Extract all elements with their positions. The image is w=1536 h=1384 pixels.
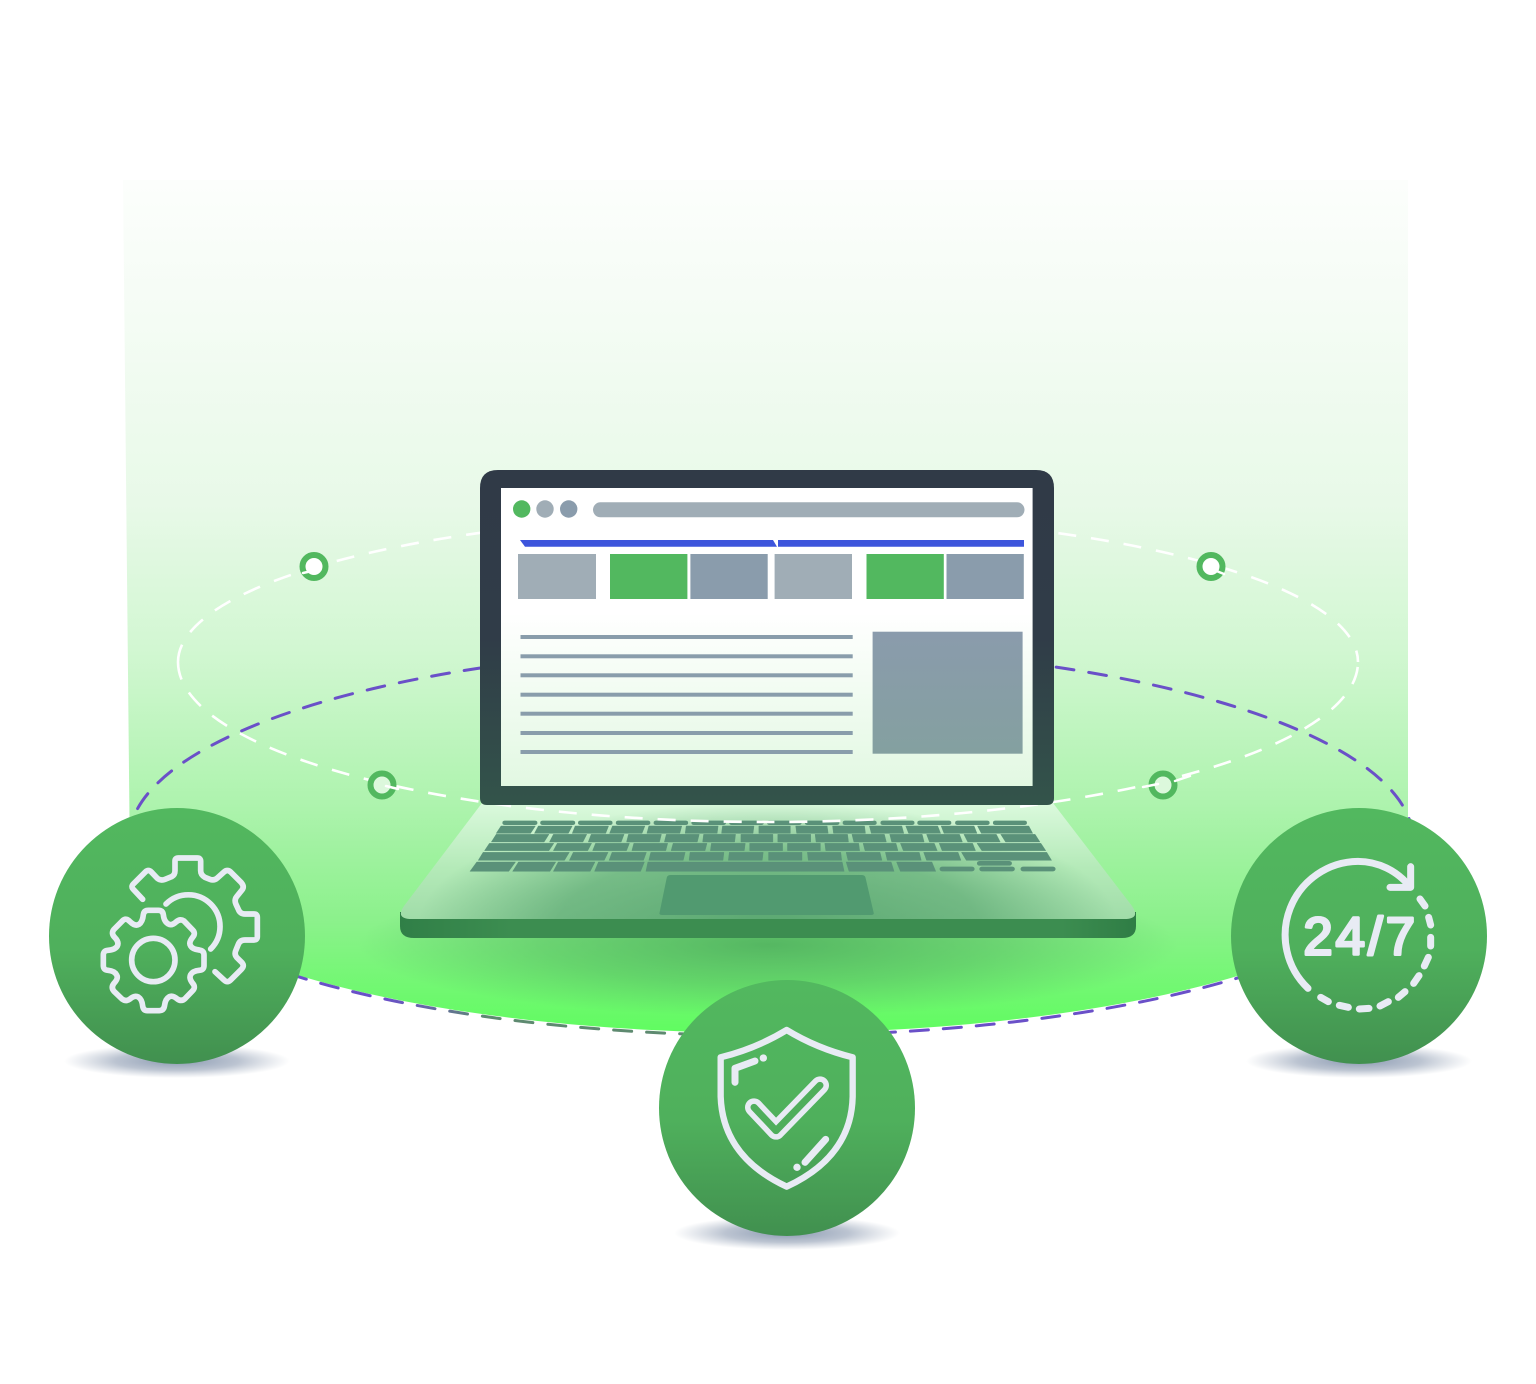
background green glow panel [123,180,1408,1033]
icon: gears [103,858,257,1011]
base deck shading [401,803,1135,919]
orbit ring marker top left [302,555,326,578]
window dots [513,500,577,518]
icon: shield with check [721,1030,853,1187]
blue nav bar [520,540,1024,547]
orbit ring marker bottom left [370,774,398,796]
orbit ring marker bottom right [1143,774,1190,796]
content tiles [518,554,1024,599]
badge shadow [64,1044,290,1078]
keyboard row 5 [478,852,1052,860]
keyboard row 3 [491,834,1040,842]
badge disc [1231,808,1487,1064]
keyboard row 2 [496,826,1033,833]
keyboard row 1 [502,821,1027,825]
bezel [480,470,1054,805]
icon: 24/7 clock arrow [1285,861,1431,1009]
white dashed orbit [178,514,1358,822]
keyboard row 6 [470,861,1055,871]
badge: security shield [659,980,915,1250]
badge shadow [1246,1044,1472,1078]
keyboard and trackpad [470,821,1055,915]
base deck [401,803,1135,919]
address bar [593,502,1024,517]
badge disc [49,808,305,1064]
badge: 24/7 support [1231,808,1487,1078]
purple dashed orbit [129,647,1413,1036]
badge disc [659,980,915,1236]
badge shadow [674,1216,900,1250]
badge: settings gears [49,808,305,1078]
laptop shadow on glow [358,873,1178,1017]
keyboard row 4 [485,843,1046,851]
screen [501,488,1033,786]
laptop base [400,803,1136,938]
text lines [520,635,853,754]
trackpad [659,875,874,915]
orbit ring marker top right [1200,555,1224,578]
image placeholder [873,632,1023,754]
base side edge [400,912,1136,938]
laptop lid [480,470,1054,805]
label: 24/7: 24/7 [1303,907,1415,966]
